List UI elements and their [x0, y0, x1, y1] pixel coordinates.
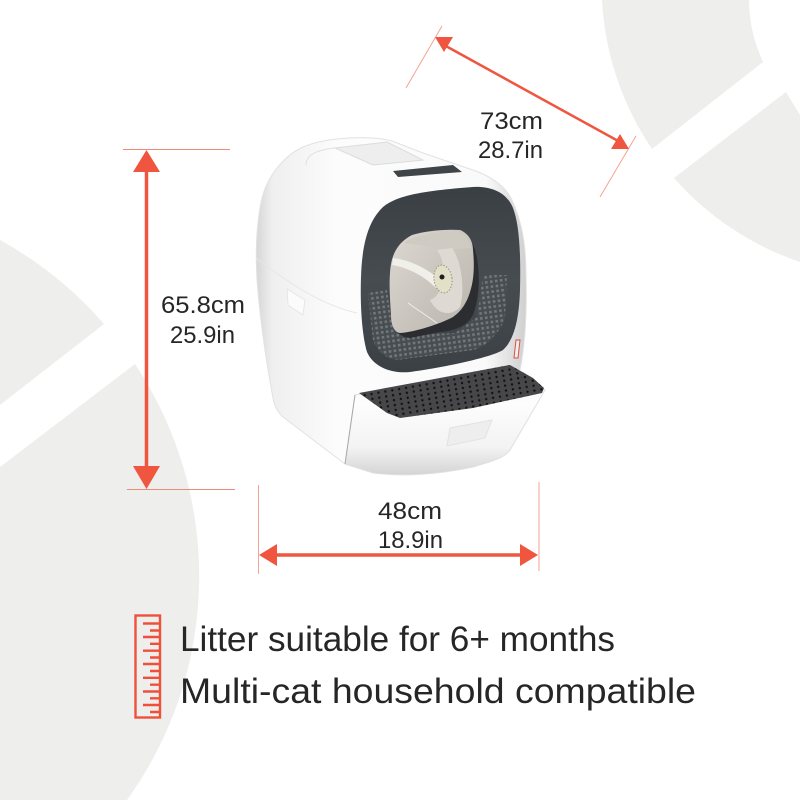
- background shape: left lower arc: [0, 364, 199, 800]
- interior floor seam: [408, 303, 437, 323]
- depth extension lines: [406, 26, 636, 197]
- height arrow: [145, 165, 148, 475]
- height extension lines: [123, 150, 235, 490]
- width label: [378, 498, 443, 554]
- interior fan: [432, 264, 454, 294]
- control panel: [393, 165, 462, 177]
- width arrowheads: [259, 544, 538, 566]
- background shape: left upper arc: [0, 240, 104, 405]
- interior wheel housing: [430, 248, 462, 313]
- side handle: [287, 289, 305, 315]
- dotted tray: [359, 365, 544, 418]
- top lid line: [306, 148, 335, 165]
- interior hub: [440, 274, 444, 280]
- depth arrowheads: [435, 37, 629, 149]
- depth arrow: [444, 45, 620, 142]
- height arrowheads: [133, 150, 160, 489]
- drawer handle: [447, 420, 492, 446]
- interior ceiling: [404, 232, 471, 250]
- background shape: top right arc: [602, 0, 763, 149]
- width label: 18.9in: [378, 527, 443, 554]
- height label: [161, 292, 245, 349]
- dimension: depth: [406, 26, 636, 197]
- warning sticker: [514, 340, 520, 358]
- icon: ruler: [136, 616, 160, 718]
- feature: multi-cat: Multi-cat household compatible: [180, 672, 696, 711]
- main body: [256, 138, 526, 464]
- depth label: 28.7in: [478, 137, 543, 164]
- door frame: [361, 187, 520, 372]
- width extension lines: [258, 482, 539, 574]
- dimension: width: [258, 482, 539, 574]
- body seam: [256, 258, 357, 313]
- interior lit wall: [390, 230, 474, 333]
- depth label: 73cm: [480, 108, 543, 135]
- background shape: right lower arc: [674, 92, 800, 262]
- drawer edge: [345, 395, 355, 464]
- depth label: [478, 108, 543, 164]
- feature list: [180, 620, 696, 711]
- height label: 25.9in: [170, 322, 235, 349]
- dotted frame grip: [368, 275, 507, 360]
- product: robotic litter box: [256, 138, 545, 475]
- feature: litter duration: Litter suitable for 6+ months: [180, 620, 615, 659]
- width label: 48cm: [378, 498, 442, 525]
- interior opening: dark depth: [390, 230, 479, 338]
- drawer: [345, 365, 545, 475]
- dimension: height: [123, 150, 245, 490]
- interior arm: [392, 258, 445, 288]
- height label: 65.8cm: [161, 292, 245, 319]
- width arrow: [272, 553, 525, 557]
- top window: [335, 142, 423, 165]
